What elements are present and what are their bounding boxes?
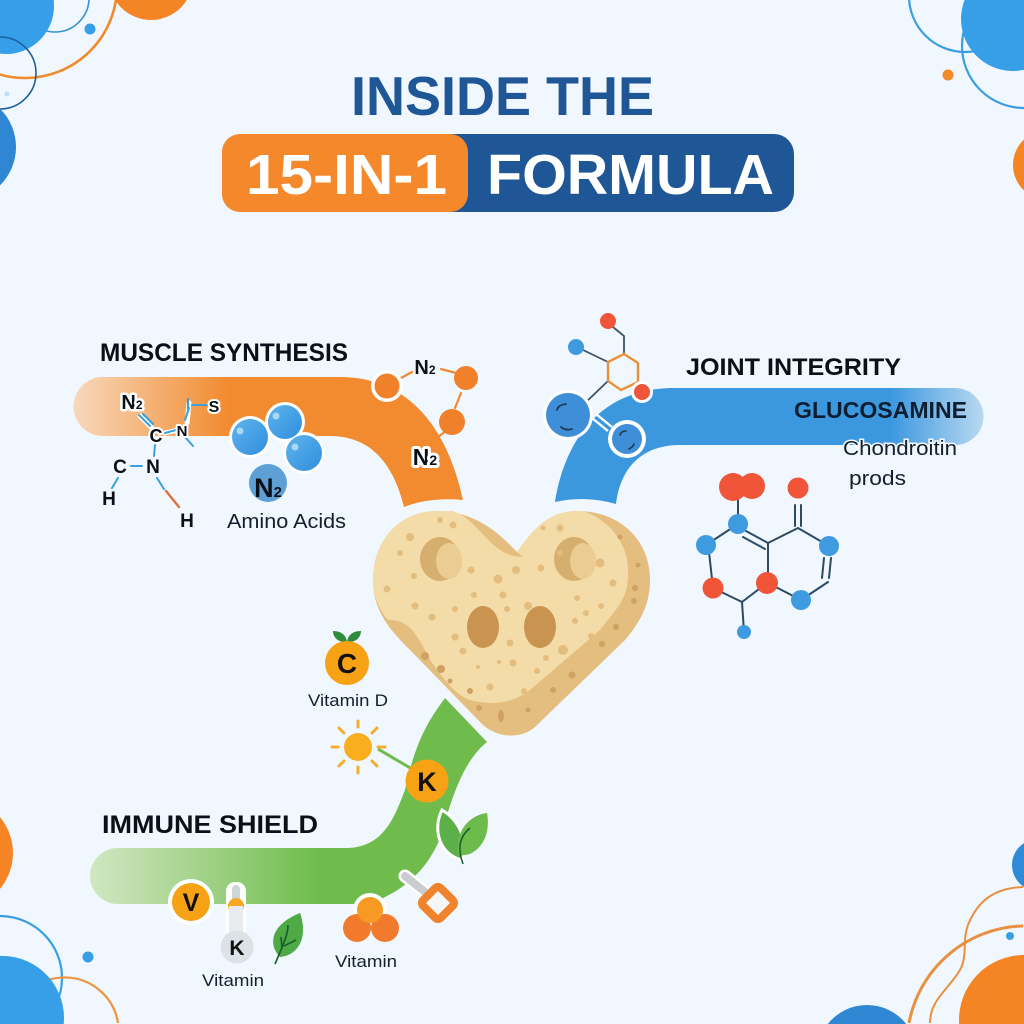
molecule: nitrogen chain: N [177, 423, 187, 440]
icon: vitamin v badge [168, 879, 214, 925]
molecule: hexagon with spheres [543, 313, 653, 458]
title pill: 15-in-1 formula [222, 134, 794, 212]
panel: muscle synthesis [74, 339, 478, 533]
icon: amino acid spheres: N2 [254, 473, 282, 503]
molecule: nitrogen chain [102, 392, 220, 532]
orange ribbon [74, 377, 463, 507]
decorative corner: top left [0, 0, 193, 201]
decorative corner: top right [909, 0, 1024, 190]
molecule: nitrogen chain: C [150, 426, 162, 446]
icon: orange cluster [343, 893, 399, 942]
molecule: orange nitrogen nodes: N2 [414, 357, 436, 379]
panel: immune shield [90, 631, 488, 990]
label: glucosamine: GLUCOSAMINE [794, 397, 967, 423]
label: amino acids: Amino Acids [227, 511, 346, 533]
icon: vitamin c orange [325, 631, 369, 685]
title pill: 15-in-1 formula: 15-IN-1 [246, 143, 447, 207]
icon: sun [332, 721, 412, 773]
molecule: nitrogen chain: H [102, 489, 116, 510]
molecule: nitrogen chain: N [146, 457, 160, 478]
icon: capsule with orange ring [405, 876, 456, 921]
icon: vitamin k dropper [220, 882, 254, 964]
icon: amino acid spheres [229, 402, 325, 503]
icon: green leaf [273, 913, 303, 964]
icon: vitamin v badge: V [183, 889, 200, 917]
title: inside the: INSIDE THE [351, 65, 654, 127]
icon: vitamin k badge [406, 760, 448, 802]
icon: heart shaped sponge [373, 511, 650, 736]
molecule: nitrogen chain: N2 [121, 392, 143, 414]
icon: vitamin k dropper: K [229, 937, 245, 960]
decorative corner: bottom right [828, 843, 1024, 1024]
green ribbon [90, 698, 487, 904]
heading: muscle synthesis: MUSCLE SYNTHESIS [100, 339, 348, 367]
blue ribbon [555, 388, 984, 504]
heading: joint integrity: JOINT INTEGRITY [686, 354, 901, 381]
label: chondroitin: Chondroitin [843, 438, 957, 460]
heading: immune shield: IMMUNE SHIELD [102, 811, 318, 839]
molecule: fused ring structure [696, 473, 839, 639]
label: vitamin: Vitamin [202, 971, 264, 990]
molecule: nitrogen chain: S [209, 399, 220, 416]
decorative corner: bottom left [0, 797, 118, 1024]
molecule: orange nitrogen nodes: N2 [413, 444, 437, 470]
molecule: nitrogen chain: H [180, 511, 194, 532]
title pill: 15-in-1 formula: FORMULA [487, 143, 774, 207]
label: vitamin: Vitamin [335, 952, 397, 971]
icon: green leaves [438, 810, 488, 864]
icon: vitamin k badge: K [417, 767, 437, 797]
panel: joint integrity [543, 313, 984, 639]
label: prods: prods [849, 468, 906, 490]
icon: vitamin c orange: C [337, 648, 357, 679]
molecule: nitrogen chain: C [113, 457, 127, 478]
molecule: orange nitrogen nodes [371, 357, 478, 470]
label: vitamin d: Vitamin D [308, 691, 388, 710]
